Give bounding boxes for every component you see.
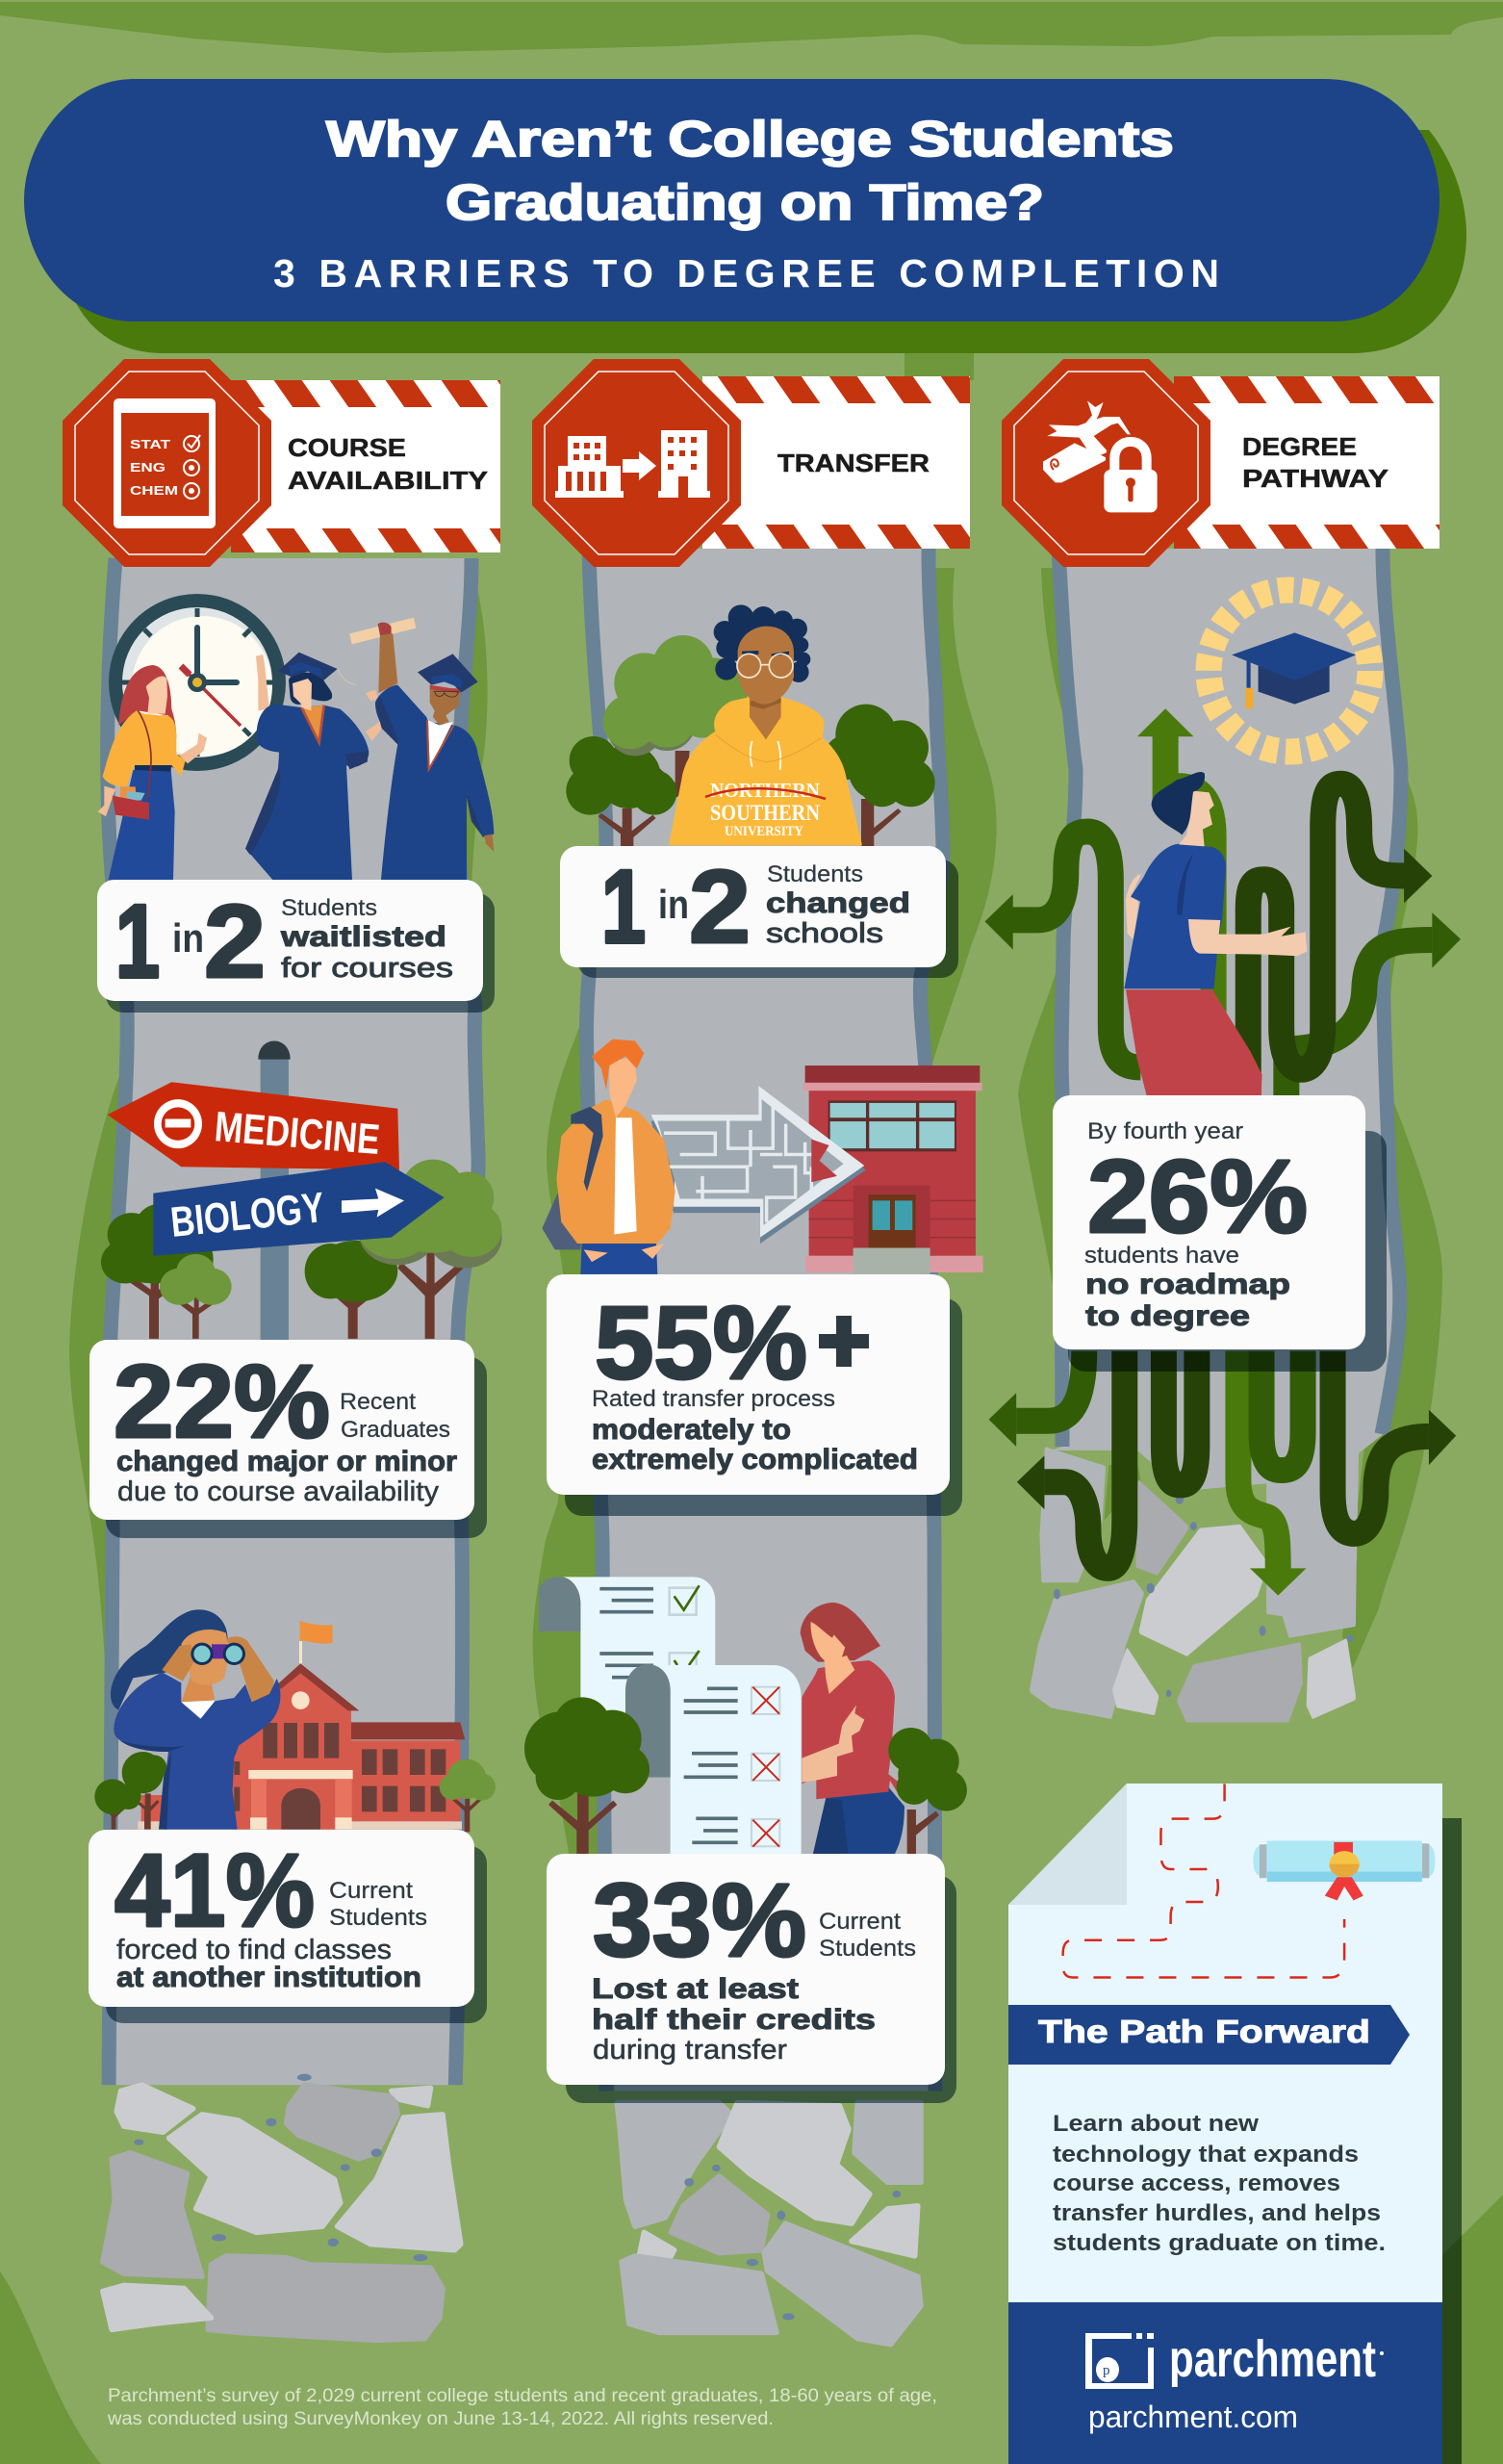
maze arrow — [651, 1086, 866, 1244]
trees — [94, 1752, 496, 1832]
stat card: 22% changed major — [89, 1340, 474, 1520]
stepping stones: column 3 — [1025, 1450, 1356, 1727]
trees — [566, 635, 935, 846]
stat card: 1 in 2 changed schools: 1 — [601, 848, 646, 964]
stat card: 41%: Students — [329, 1905, 427, 1931]
stat card: 55%+: moderately to — [592, 1414, 791, 1446]
stat card: 26%: to degree — [1085, 1300, 1250, 1332]
stat card: 55%+: Rated transfer process — [592, 1386, 835, 1412]
woman with binoculars — [111, 1609, 280, 1830]
label: AVAILABILITY — [288, 466, 488, 495]
stat card: 1 in 2 changed schools: schools — [766, 918, 883, 949]
sign label: Medicine: MEDICINE — [213, 1103, 382, 1164]
stat card: 33%: 33% — [593, 1861, 806, 1978]
icon: diploma and padlock — [1043, 400, 1158, 512]
trees — [101, 1160, 502, 1339]
logo: parchment — [1085, 2330, 1384, 2389]
stat card: 1 in 2 changed schools — [560, 846, 946, 967]
title banner shadow — [69, 130, 1466, 353]
footer block — [1008, 2302, 1442, 2464]
page fold — [1008, 1784, 1127, 1905]
icon: sunburst with graduation cap — [1209, 590, 1370, 752]
stat card: 1 in 2 changed schools: Students — [767, 861, 863, 887]
label: COURSE — [288, 433, 406, 462]
stat card: 1 in 2 waitlisted: 2 — [204, 883, 266, 999]
illustration: student, maze arrow and building — [542, 1040, 983, 1274]
card shadows — [106, 860, 1387, 2103]
second scroll with crosses — [625, 1664, 802, 1854]
stat card: 1 in 2 changed schools: 2 — [689, 848, 751, 964]
stat card: 41% — [89, 1830, 474, 2007]
icon: course checklist: CHEM — [130, 483, 178, 498]
campus building — [138, 1621, 465, 1830]
stat card: 1 in 2 waitlisted: for courses — [281, 953, 453, 984]
body text: Learn about new — [1053, 2111, 1259, 2137]
stat card: 41%: 41% — [115, 1832, 315, 1948]
label — [1242, 432, 1388, 493]
road: column 2 — [587, 549, 943, 2108]
stat card: 55%+ — [547, 1274, 950, 1495]
stat card: 26% — [1053, 1095, 1365, 1349]
body text: course access, removes — [1053, 2170, 1340, 2196]
icon: course checklist: STAT — [130, 437, 170, 451]
sign: Medicine — [108, 1082, 399, 1169]
icon: course checklist — [114, 398, 216, 528]
vine: down arrow — [1238, 1351, 1307, 1596]
stat card: 1 in 2 waitlisted: 1 — [115, 883, 160, 999]
hoodie lettering — [705, 779, 826, 839]
footnote: Parchment’s survey of 2,029 current college students and recent graduates, 18-60 years of age, — [108, 2386, 937, 2406]
stat card: 26%: students have — [1084, 1243, 1239, 1269]
stat card: 55%+: extremely complicated — [592, 1444, 918, 1476]
building — [803, 1065, 983, 1274]
title: Graduating on Time? — [446, 175, 1044, 231]
stat card: 41%: Current — [329, 1878, 413, 1904]
subtitle: 3 BARRIERS TO DEGREE COMPLETION — [273, 251, 1219, 295]
road: column 1 — [108, 558, 478, 2094]
stat card: 33% — [547, 1854, 945, 2085]
vine: up arrow — [1137, 708, 1213, 1093]
vine: left arrow lower — [989, 1351, 1084, 1447]
logo: parchment: parchment — [1169, 2330, 1376, 2388]
stat card: 33%: Lost at least — [592, 1973, 799, 2005]
vine: right arrow top — [1248, 783, 1432, 1097]
head — [737, 627, 794, 739]
vine: right arrow middle — [1286, 912, 1461, 1097]
label: DEGREE — [1242, 432, 1357, 461]
hoodie lettering: UNIVERSITY — [725, 824, 803, 839]
hair — [714, 604, 810, 682]
stat card: 1 in 2 changed schools: changed — [766, 887, 910, 919]
stat card: 22% changed major: Graduates — [341, 1417, 450, 1443]
banner — [1008, 2005, 1410, 2065]
title banner — [24, 79, 1439, 321]
stat card: 41%: at another institution — [116, 1962, 421, 1993]
vine: left arrow bottom — [1017, 1351, 1197, 1568]
stat card: 1 in 2 waitlisted: in — [172, 915, 204, 961]
illustration: woman with binoculars and campus — [94, 1609, 496, 1832]
graduate one — [245, 653, 383, 880]
trees — [524, 1697, 967, 1854]
stat card: 26%: 26% — [1087, 1138, 1308, 1254]
footnote — [107, 2386, 937, 2429]
illustration: woman and two graduates — [98, 618, 494, 880]
body text: transfer hurdles, and helps — [1053, 2200, 1381, 2226]
website: parchment.com — [1088, 2400, 1298, 2434]
stat card: 1 in 2 changed schools: in — [658, 882, 689, 927]
barrier sign: degree pathway — [1002, 359, 1439, 567]
stat card: 55%+: 55% — [595, 1284, 807, 1400]
banner title: The Path Forward — [1038, 2014, 1370, 2049]
woman with shoulder bag — [98, 665, 207, 880]
body text — [1053, 2111, 1386, 2256]
illustration: trees and student in hoodie — [566, 604, 935, 846]
graduate two — [349, 618, 494, 880]
illustration: trees and signpost — [101, 1041, 502, 1342]
stat card: 22% changed major: 22% — [114, 1343, 330, 1459]
barrier sign: course availability — [63, 359, 500, 567]
label: TRANSFER — [777, 449, 930, 477]
stat card: 1 in 2 waitlisted — [97, 880, 483, 1001]
stat card: 33%: half their credits — [592, 2004, 876, 2036]
icon: buildings with arrow — [555, 430, 710, 498]
stat card: 1 in 2 waitlisted: waitlisted — [280, 921, 446, 953]
illustration: clock — [109, 594, 286, 771]
stat card: 22% changed major: Recent — [340, 1389, 416, 1415]
stat card: 33%: during transfer — [593, 2035, 787, 2066]
icon: course checklist: ENG — [130, 460, 166, 475]
stat card: 26%: By fourth year — [1087, 1118, 1243, 1144]
body text: technology that expands — [1053, 2142, 1359, 2168]
maze vines with arrows — [984, 708, 1461, 1596]
illustration: person walking into maze — [1124, 772, 1307, 1095]
stepping stones: column 1 and column 2 — [100, 2074, 960, 2365]
title — [326, 112, 1174, 231]
illustration: credit scrolls and woman — [524, 1577, 967, 1854]
student with backpack — [542, 1040, 675, 1274]
stat card: 22% changed major: changed major or minor — [116, 1446, 457, 1477]
panel: The Path Forward — [1008, 1784, 1462, 2464]
first scroll with checks — [539, 1577, 715, 1778]
stat card: 33%: Current — [819, 1909, 901, 1935]
sign label: Biology: BIOLOGY — [168, 1184, 326, 1246]
logo: parchment: p — [1103, 2363, 1110, 2378]
signpost pole — [258, 1041, 291, 1342]
dashed path and diploma — [1063, 1784, 1435, 1977]
hoodie lettering: NORTHERN — [710, 779, 820, 802]
vine: right arrow bottom — [1333, 1351, 1456, 1533]
sign: Biology — [153, 1162, 445, 1256]
stat card: 22% changed major: due to course availability — [117, 1476, 440, 1507]
stat card: 41%: forced to find classes — [116, 1935, 392, 1965]
title: Why Aren’t College Students — [326, 112, 1174, 167]
vine: lower middle loop — [1261, 1351, 1303, 1471]
stat card: 26%: no roadmap — [1085, 1269, 1290, 1300]
road: column 3 — [1041, 549, 1401, 1627]
body text: students graduate on time. — [1053, 2230, 1386, 2256]
stat card: 1 in 2 waitlisted: Students — [281, 895, 377, 921]
stat card: 33%: Students — [819, 1936, 916, 1962]
barrier sign: transfer — [532, 359, 970, 567]
woman in red hoodie — [801, 1603, 909, 1854]
vine: left arrow upper — [984, 832, 1140, 1067]
label — [288, 433, 488, 495]
footnote: was conducted using SurveyMonkey on June 13-14, 2022. All rights reserved. — [107, 2409, 774, 2429]
label: PATHWAY — [1242, 464, 1388, 493]
hoodie — [669, 697, 862, 845]
hoodie lettering: SOUTHERN — [710, 801, 820, 825]
